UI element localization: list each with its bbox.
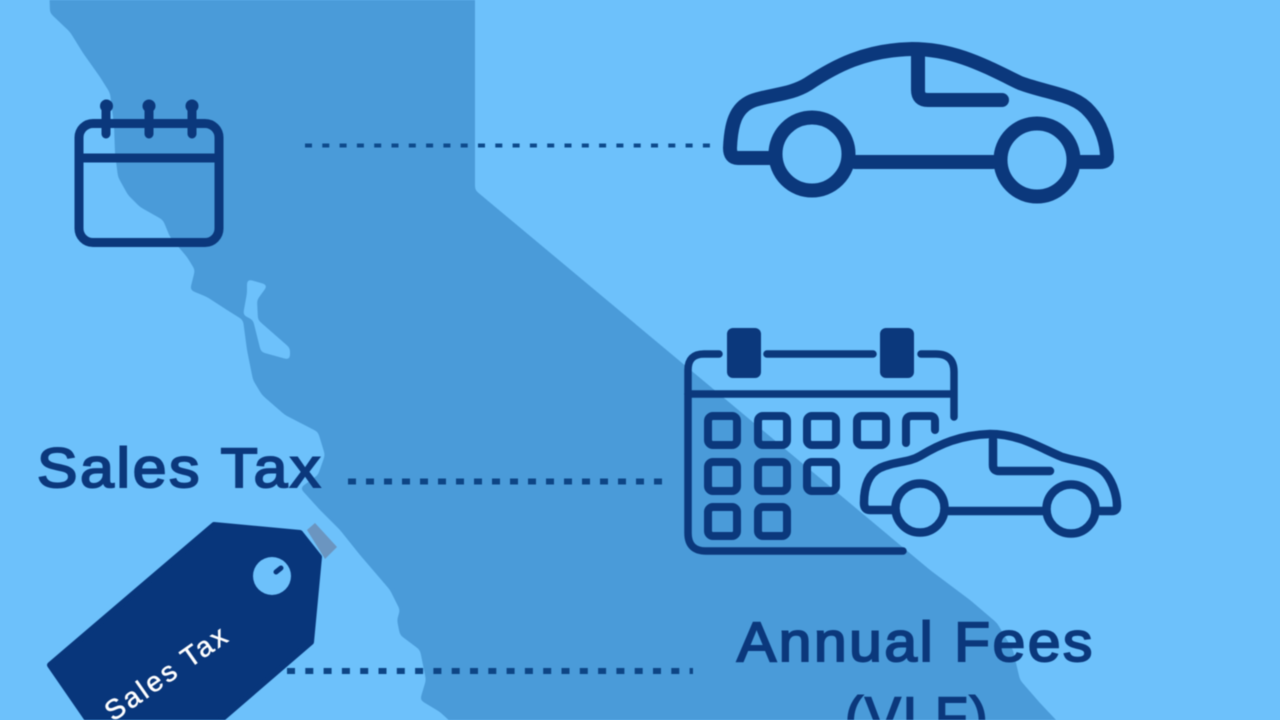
small car bbox=[864, 434, 1117, 534]
dotted connector: sales tax to calendar and car bbox=[348, 478, 667, 484]
tag hole bbox=[253, 557, 291, 595]
heading: Sales Tax: Sales Tax bbox=[37, 436, 323, 499]
icon: wall calendar bbox=[79, 100, 219, 242]
calendar rings bbox=[727, 328, 761, 378]
map: lake inlet bbox=[243, 279, 290, 360]
tag string bbox=[276, 568, 281, 572]
dotted connector: price tag to annual fees bbox=[287, 668, 693, 674]
tag body bbox=[50, 525, 319, 720]
dotted connector: calendar to car bbox=[305, 144, 712, 148]
heading: Annual Fees: Annual Fees bbox=[737, 610, 1095, 673]
icon: car outline bbox=[730, 49, 1107, 196]
calendar frame bbox=[688, 354, 954, 551]
tag loop bbox=[307, 523, 337, 559]
icon: calendar with car bbox=[688, 328, 1117, 551]
calendar day squares bbox=[708, 416, 935, 536]
icon: sales tax price tag bbox=[50, 523, 337, 720]
